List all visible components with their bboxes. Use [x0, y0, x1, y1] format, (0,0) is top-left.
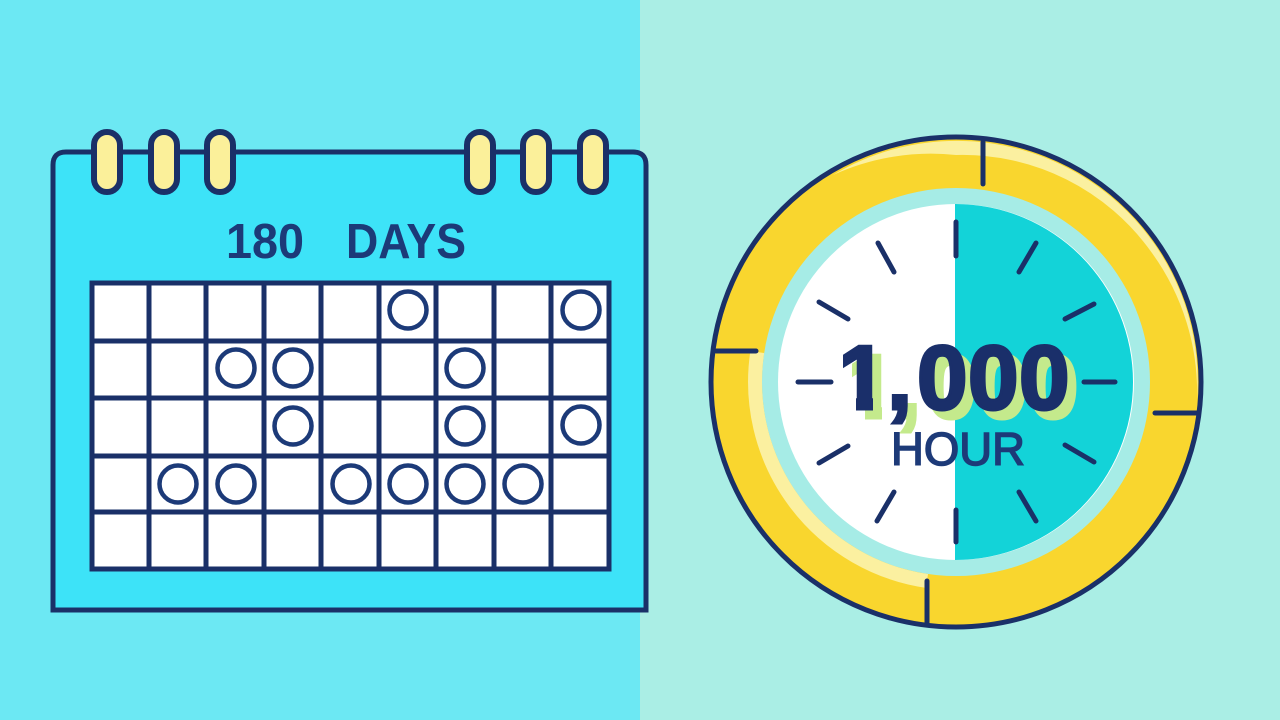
clock number: 1,000: 0	[917, 328, 968, 429]
clock number: 1,000: 0	[926, 337, 977, 438]
rim ticks	[716, 142, 1197, 623]
clock number: 1,000: 0	[977, 337, 1028, 438]
panel: left background	[0, 0, 640, 720]
calendar heading: 180 days	[226, 215, 466, 269]
rim highlight: lower left	[755, 352, 927, 581]
calendar grid	[92, 283, 609, 569]
clock number: 1,000	[843, 344, 1076, 434]
clock number: 1,000: 0	[968, 328, 1019, 429]
clock face white half	[778, 204, 1134, 560]
calendar heading: 180 days: DAYS	[346, 215, 466, 269]
clock label: hour: HOUR	[891, 423, 1025, 475]
calendar heading: 180 days: 180	[226, 215, 304, 269]
clock number: 1,000: 0	[1028, 337, 1079, 438]
clock number: 1,000: 0	[1019, 328, 1070, 429]
panel: right background	[640, 0, 1280, 720]
face ticks	[798, 222, 1115, 542]
clock face teal half	[955, 204, 1133, 560]
pale inner ring	[762, 188, 1150, 576]
clock number: 1,000: 1	[846, 337, 897, 438]
calendar	[53, 132, 646, 610]
marked days	[160, 292, 600, 502]
clock yellow rim	[712, 138, 1200, 626]
binder rings	[94, 132, 606, 192]
clock number: 1,000: 1	[837, 328, 888, 429]
clock	[711, 137, 1201, 627]
clock number: 1,000: ,	[887, 328, 912, 429]
clock number: 1,000: ,	[896, 337, 921, 438]
calendar body	[53, 152, 646, 610]
rim outline	[711, 137, 1201, 627]
rim highlight: upper right	[833, 141, 1198, 400]
